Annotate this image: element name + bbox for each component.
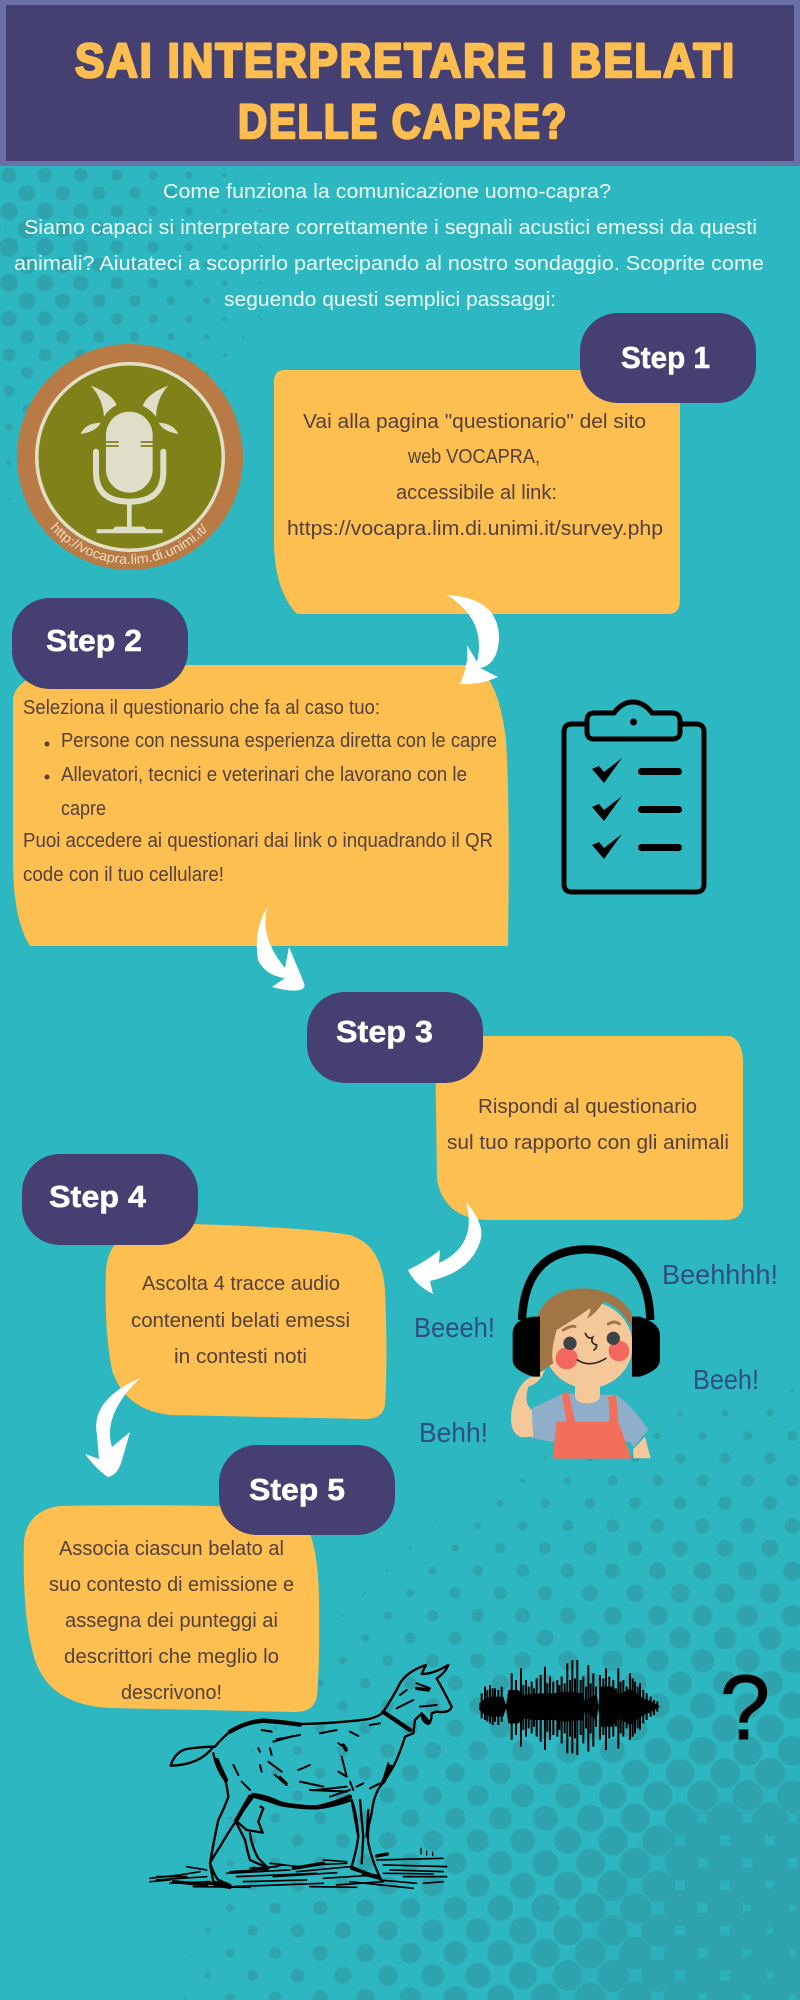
panel: step 1: web VOCAPRA,	[407, 446, 540, 468]
step 5 badge: Step 5	[249, 1472, 345, 1507]
intro text: Siamo capaci si interpretare correttamente i segnali acustici emessi da questi	[24, 217, 757, 239]
step 2 badge: Step 2	[46, 623, 142, 658]
panel: step 2: code con il tuo cellulare!	[23, 864, 224, 886]
title: SAI INTERPRETARE I BELATI	[75, 35, 736, 88]
arrow: step 1 to step 2	[447, 595, 499, 684]
panel: step 4	[22, 1154, 386, 1419]
header banner with title	[0, 0, 800, 166]
panel: step 2: Seleziona il questionario che fa al caso tuo:	[23, 697, 380, 719]
step 1 badge: Step 1	[621, 340, 710, 375]
icon: clipboard	[564, 702, 704, 892]
panel: step 5: suo contesto di emissione e	[49, 1574, 294, 1596]
panel: step 3: sul tuo rapporto con gli animali	[447, 1132, 729, 1154]
panel: step 2	[12, 598, 509, 946]
step 1 badge	[580, 313, 756, 403]
panel: step 3	[307, 992, 743, 1220]
panel: step 1: https://vocapra.lim.di.unimi.it/survey.php	[287, 518, 663, 540]
panel: step 1: accessibile al link:	[396, 482, 557, 504]
panel: step 4: Ascolta 4 tracce audio	[142, 1273, 340, 1295]
panel: step 2: capre	[61, 798, 106, 820]
step 3 badge	[307, 992, 483, 1083]
panel: step 2: Persone con nessuna esperienza diretta con le capre	[61, 730, 497, 752]
panel: step 2: Puoi accedere ai questionari dai link o inquadrando il QR	[23, 830, 493, 852]
intro text: Come funziona la comunicazione uomo-capra?	[163, 181, 611, 203]
intro text: animali? Aiutateci a scoprirlo partecipando al nostro sondaggio. Scoprite come	[14, 253, 764, 275]
icon: VOCAPRA logo	[17, 344, 243, 570]
step 5 badge	[219, 1445, 395, 1535]
labels: bleat sounds: Beeeh!	[414, 1312, 495, 1343]
intro text: seguendo questi semplici passaggi:	[224, 289, 556, 311]
step 2 badge	[12, 598, 188, 689]
step 4 badge: Step 4	[49, 1179, 147, 1214]
step 3 badge: Step 3	[336, 1014, 433, 1049]
icon: question mark: ?	[720, 1657, 770, 1759]
panel: step 4: in contesti noti	[174, 1346, 307, 1368]
step 4 badge	[22, 1154, 198, 1245]
arrow: step 4 to step 5	[85, 1378, 140, 1477]
labels: bleat sounds	[414, 1259, 778, 1448]
title	[75, 35, 736, 149]
labels: bleat sounds: Beehhhh!	[662, 1259, 778, 1290]
title: DELLE CAPRE?	[238, 96, 568, 149]
panel: step 5: Associa ciascun belato al	[59, 1538, 284, 1560]
labels: bleat sounds: Behh!	[419, 1417, 488, 1448]
arrow: step 3 to step 4	[408, 1202, 481, 1294]
panel: step 5: descrivono!	[121, 1682, 222, 1704]
illustration: child with headphones	[511, 1249, 660, 1459]
icon: sound waveform	[479, 1660, 660, 1755]
panel: step 5: assegna dei punteggi ai	[65, 1610, 278, 1632]
arrow: step 2 to step 3	[257, 906, 304, 991]
panel: step 3: Rispondi al questionario	[478, 1096, 697, 1118]
labels: bleat sounds: Beeh!	[693, 1364, 759, 1395]
panel: step 5	[24, 1445, 395, 1712]
panel: step 5: descrittori che meglio lo	[64, 1646, 279, 1668]
panel: step 2: Allevatori, tecnici e veterinari che lavorano con le	[61, 764, 467, 786]
panel: step 4: contenenti belati emessi	[131, 1310, 350, 1332]
panel: step 1: Vai alla pagina "questionario" del sito	[303, 411, 646, 433]
panel: step 1	[274, 313, 756, 614]
illustration: goat	[150, 1665, 452, 1888]
icon: VOCAPRA logo: http://vocapra.lim.di.unimi.it/	[50, 522, 206, 564]
intro text	[14, 181, 764, 311]
